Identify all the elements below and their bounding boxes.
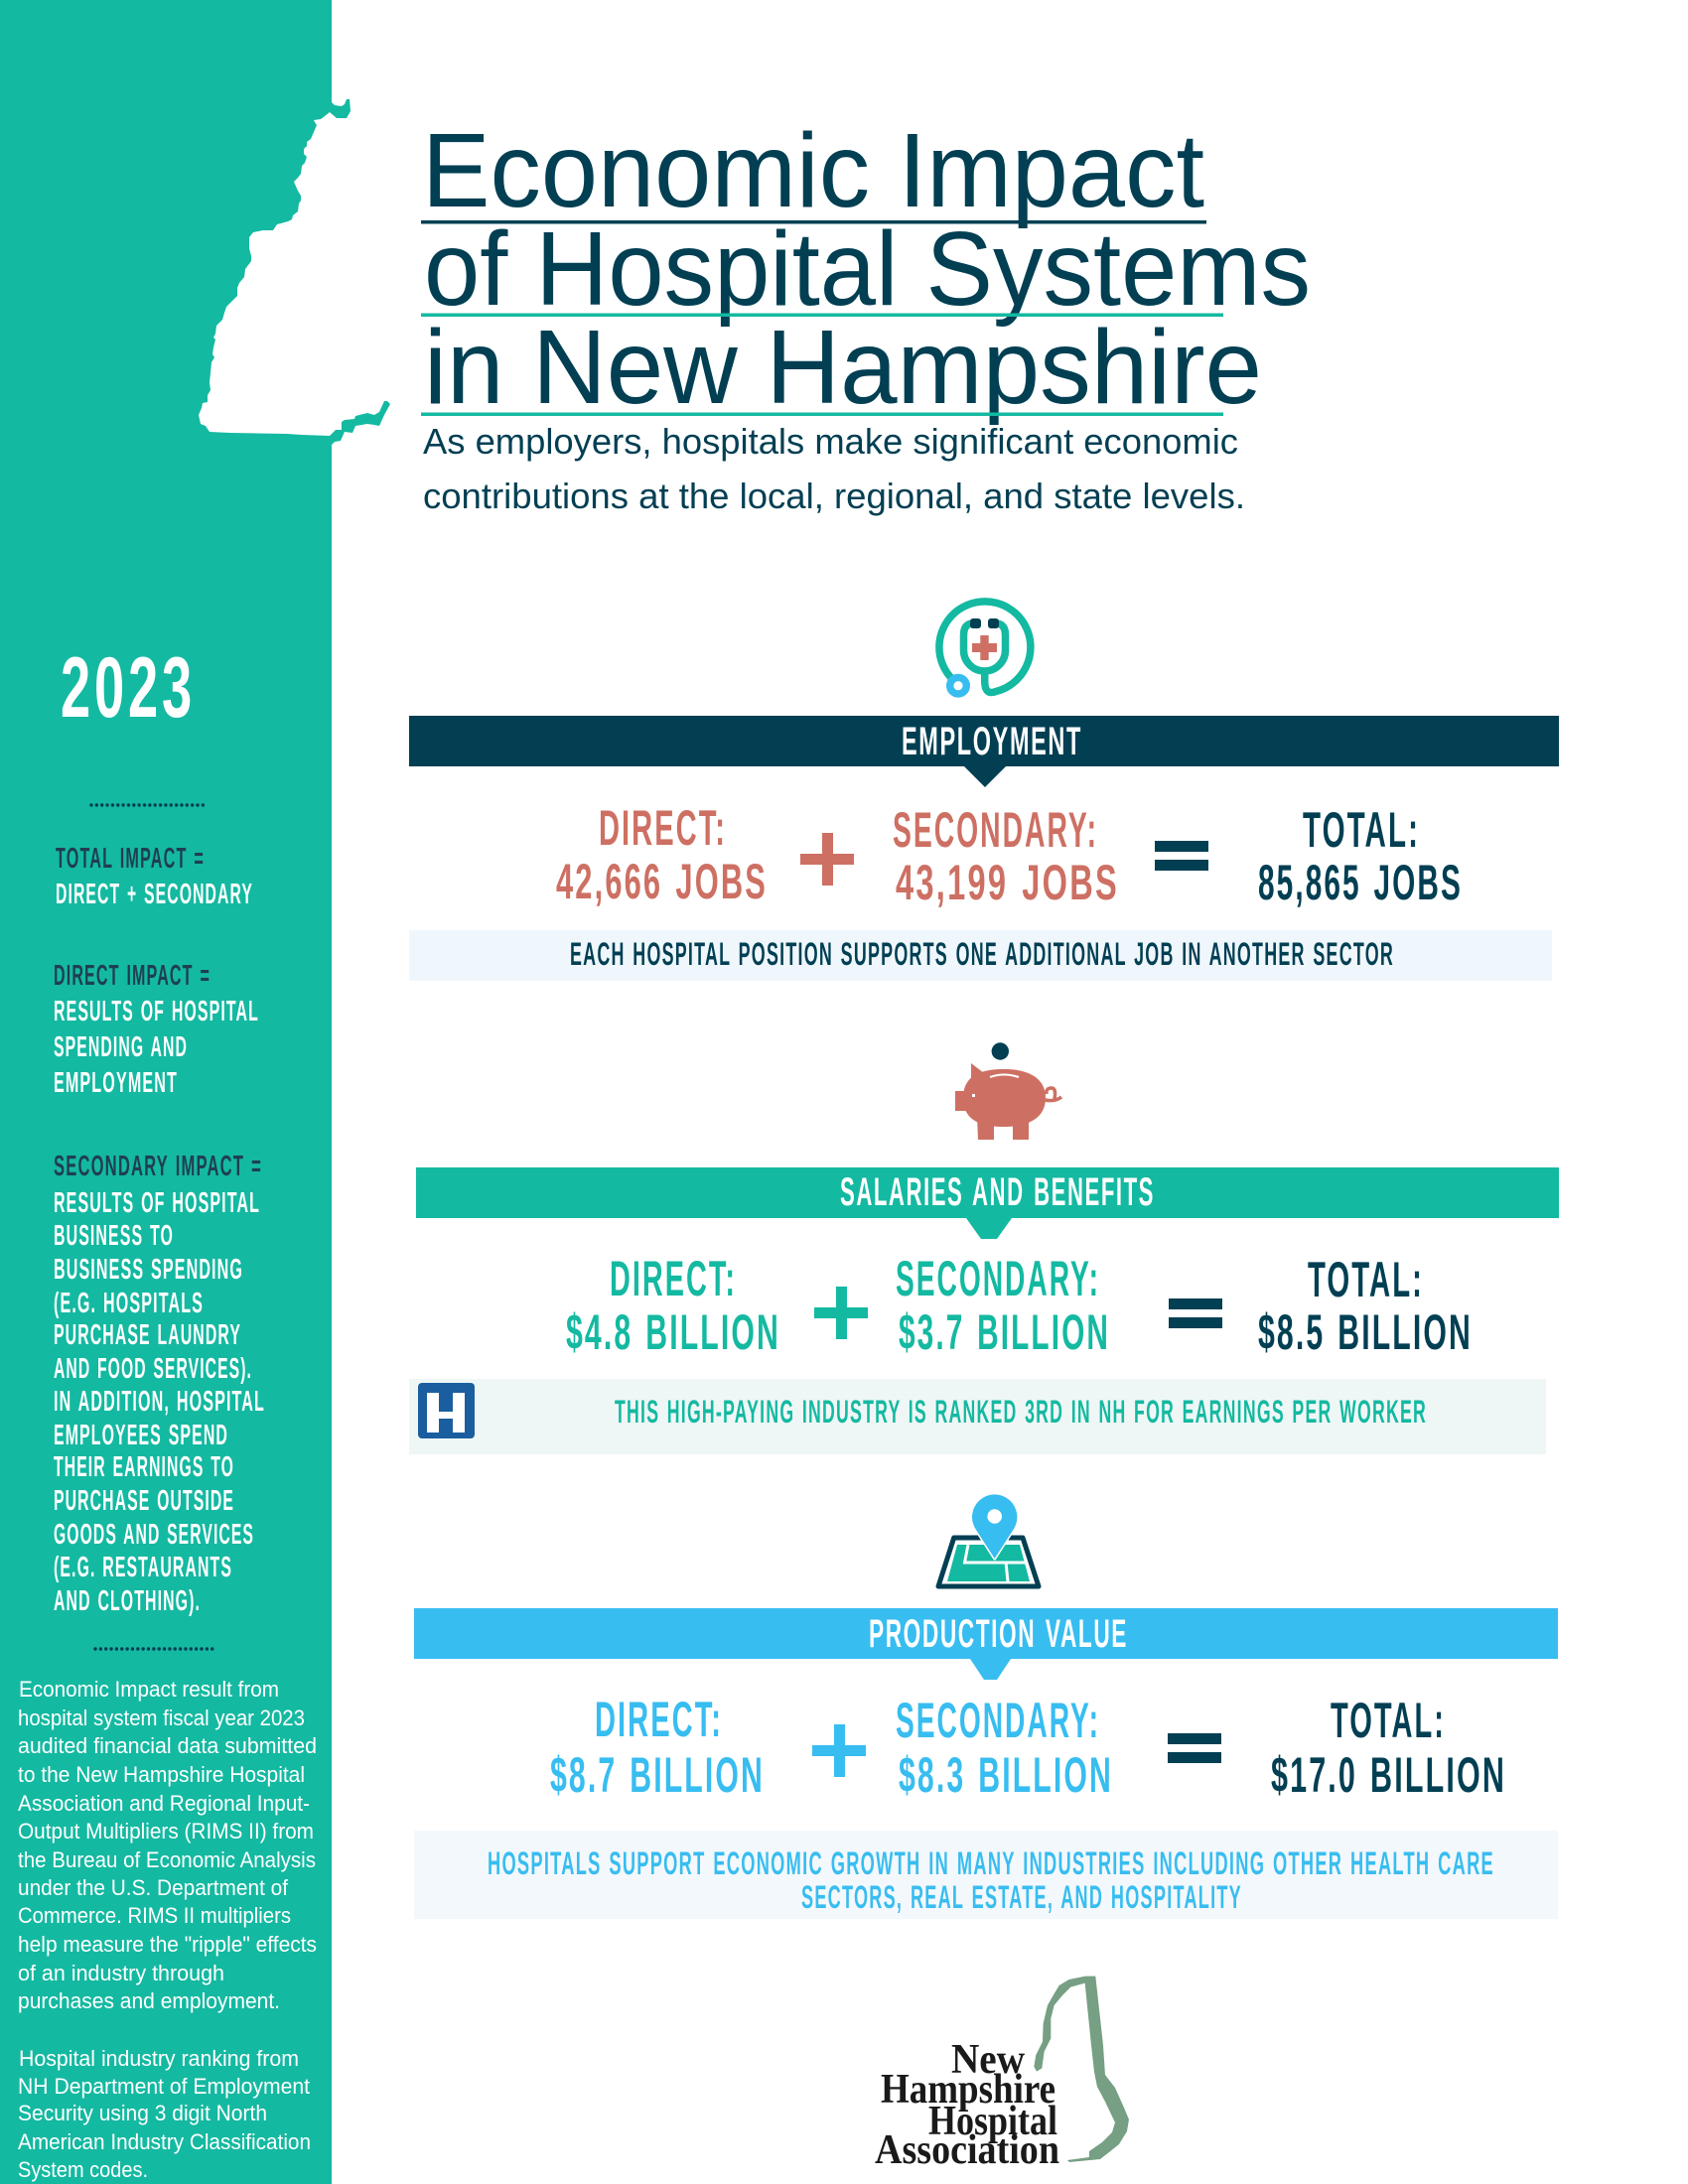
sidebar source notes: hospital system fiscal year 2023 — [18, 1706, 305, 1730]
definition: secondary impact: EMPLOYEES SPEND — [54, 1420, 228, 1451]
sidebar source notes: Association and Regional Input- — [18, 1791, 310, 1816]
sidebar source notes: audited financial data submitted — [18, 1733, 317, 1758]
sidebar definitions — [54, 805, 265, 1649]
definition: secondary impact: PURCHASE LAUNDRY — [54, 1319, 241, 1351]
stat: total production — [1271, 1693, 1506, 1803]
icon: piggy bank — [955, 1042, 1061, 1140]
definition: secondary impact: PURCHASE OUTSIDE — [54, 1485, 234, 1517]
definition: secondary impact: BUSINESS TO — [54, 1220, 174, 1252]
callout: economic growth — [414, 1831, 1558, 1919]
definition: direct impact: EMPLOYMENT — [54, 1067, 178, 1099]
definition: direct impact — [54, 960, 259, 1099]
section: production value — [414, 1608, 1558, 1919]
stat: secondary salaries: $3.7 BILLION — [899, 1304, 1110, 1360]
stat: total production: $17.0 BILLION — [1271, 1747, 1506, 1803]
sidebar source notes: the Bureau of Economic Analysis — [18, 1847, 316, 1872]
subtitle: As employers, hospitals make significant economic — [423, 421, 1238, 462]
title — [421, 112, 1311, 426]
definition: secondary impact: GOODS AND SERVICES — [54, 1519, 254, 1551]
definition: direct impact: SPENDING AND — [54, 1031, 188, 1063]
definition: secondary impact — [54, 1151, 265, 1617]
stat: secondary jobs: 43,199 JOBS — [896, 855, 1119, 910]
stat: secondary jobs: SECONDARY: — [893, 802, 1098, 858]
definition: secondary impact: BUSINESS SPENDING — [54, 1254, 243, 1286]
stat: secondary production: SECONDARY: — [896, 1693, 1100, 1748]
plus sign — [812, 1724, 866, 1777]
stat: total production: TOTAL: — [1331, 1693, 1446, 1748]
banner: salaries and benefits — [416, 1167, 1559, 1239]
stat: direct jobs — [556, 800, 768, 909]
sidebar source notes: Hospital industry ranking from — [19, 2046, 299, 2071]
equals sign — [1155, 841, 1208, 871]
stat: secondary salaries — [896, 1251, 1110, 1360]
section: salaries and benefits — [409, 1167, 1559, 1454]
stat: secondary production: $8.3 BILLION — [899, 1747, 1113, 1803]
sidebar source notes: NH Department of Employment — [18, 2074, 310, 2099]
sidebar source notes: help measure the "ripple" effects — [18, 1932, 317, 1957]
title: in New Hampshire — [424, 309, 1262, 426]
banner: employment — [409, 716, 1559, 787]
stat: total jobs: 85,865 JOBS — [1258, 855, 1463, 910]
stat: total salaries — [1258, 1252, 1473, 1360]
logo: New Hampshire Hospital Association: Hampshire — [881, 2067, 1055, 2113]
definition: secondary impact: (E.G. RESTAURANTS — [54, 1552, 232, 1583]
stat: total salaries: TOTAL: — [1308, 1252, 1424, 1307]
stat: total jobs — [1258, 802, 1463, 910]
definition: total impact: DIRECT + SECONDARY — [56, 879, 253, 910]
stat: direct salaries: $4.8 BILLION — [566, 1304, 780, 1360]
banner: employment: EMPLOYMENT — [902, 720, 1082, 763]
sidebar source notes: System codes. — [18, 2157, 148, 2182]
definition: secondary impact: SECONDARY IMPACT = — [54, 1151, 262, 1182]
logo: New Hampshire Hospital Association: Hospital — [928, 2099, 1057, 2144]
stat: direct salaries: DIRECT: — [610, 1251, 737, 1306]
subtitle — [423, 421, 1245, 516]
banner: production value: PRODUCTION VALUE — [869, 1612, 1128, 1656]
sidebar source notes: Economic Impact result from — [19, 1677, 279, 1702]
definition: total impact: TOTAL IMPACT = — [56, 843, 205, 875]
callout: economic growth: SECTORS, REAL ESTATE, AND HOSPITALITY — [801, 1879, 1242, 1915]
definition: direct impact: DIRECT IMPACT = — [54, 960, 211, 992]
sidebar source notes: to the New Hampshire Hospital — [18, 1762, 305, 1787]
plus sign — [800, 833, 854, 886]
callout: employment note — [409, 930, 1552, 981]
sidebar source notes: of an industry through — [18, 1961, 224, 1985]
stat: secondary production — [896, 1693, 1113, 1803]
sidebar source notes: under the U.S. Department of — [18, 1875, 289, 1900]
stat: total salaries: $8.5 BILLION — [1258, 1304, 1473, 1360]
definition: secondary impact: AND FOOD SERVICES). — [54, 1353, 252, 1385]
year: 2023 — [61, 640, 196, 736]
stat: direct jobs: DIRECT: — [599, 800, 727, 856]
sidebar source notes: purchases and employment. — [18, 1988, 280, 2013]
definition: total impact — [56, 843, 253, 910]
sidebar source notes: Security using 3 digit North — [18, 2101, 267, 2125]
equals sign — [1168, 1733, 1221, 1763]
icon: map with location pin — [938, 1494, 1039, 1586]
sidebar source notes — [18, 1677, 317, 2182]
callout: earnings rank — [409, 1379, 1546, 1454]
definition: secondary impact: AND CLOTHING). — [54, 1585, 201, 1617]
banner: salaries and benefits: SALARIES AND BENEFITS — [840, 1170, 1155, 1214]
definition: secondary impact: IN ADDITION, HOSPITAL — [54, 1386, 265, 1418]
section: employment — [409, 716, 1559, 981]
sidebar source notes: American Industry Classification — [18, 2129, 311, 2154]
stat: secondary salaries: SECONDARY: — [896, 1251, 1100, 1306]
definition: secondary impact: THEIR EARNINGS TO — [54, 1451, 234, 1483]
icon: stethoscope — [939, 602, 1031, 694]
stat: direct jobs: 42,666 JOBS — [556, 854, 768, 909]
title: of Hospital Systems — [424, 210, 1311, 328]
stat: direct production — [550, 1692, 765, 1803]
definition: secondary impact: RESULTS OF HOSPITAL — [54, 1187, 260, 1219]
equals sign — [1169, 1298, 1222, 1328]
icon: hospital H — [418, 1383, 475, 1438]
stat: total jobs: TOTAL: — [1303, 802, 1420, 858]
definition: secondary impact: (E.G. HOSPITALS — [54, 1288, 204, 1319]
logo: New Hampshire Hospital Association — [875, 1977, 1129, 2173]
subtitle: contributions at the local, regional, and state levels. — [423, 476, 1245, 516]
stat: direct production: DIRECT: — [595, 1692, 723, 1747]
sidebar source notes: Output Multipliers (RIMS II) from — [18, 1819, 314, 1843]
logo: New Hampshire Hospital Association: New — [951, 2037, 1026, 2083]
banner: production value — [414, 1608, 1558, 1680]
panel: teal sidebar with New Hampshire map cut-out — [0, 0, 390, 2184]
definition: direct impact: RESULTS OF HOSPITAL — [54, 996, 259, 1027]
title: Economic Impact — [422, 112, 1204, 229]
sidebar source notes: Commerce. RIMS II multipliers — [18, 1903, 291, 1928]
stat: direct salaries — [566, 1251, 780, 1360]
logo: New Hampshire Hospital Association: Association — [875, 2127, 1059, 2173]
stat: secondary jobs — [893, 802, 1119, 910]
plus sign — [814, 1287, 868, 1339]
stat: direct production: $8.7 BILLION — [550, 1747, 765, 1803]
